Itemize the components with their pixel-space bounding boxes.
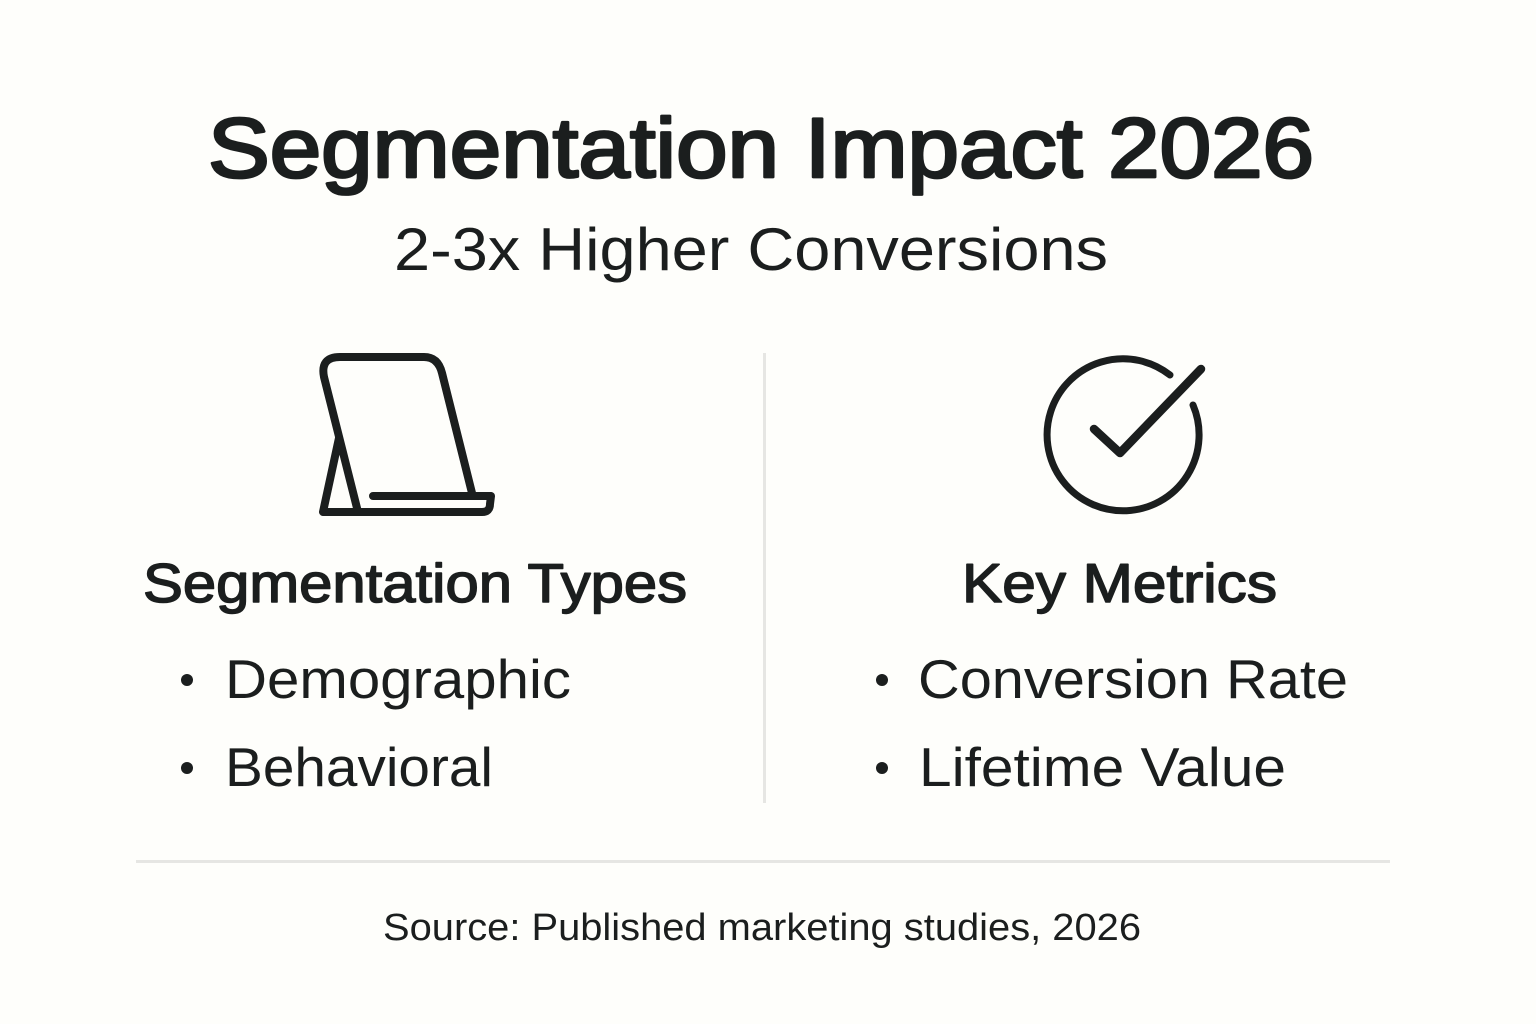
heading: key metrics: Key Metrics	[962, 552, 1277, 614]
source note: Source: Published marketing studies, 2026	[383, 907, 1141, 949]
list: key metrics: Conversion Rate	[918, 648, 1348, 710]
icon: tablet on stand	[323, 357, 491, 512]
panel: segmentation types	[143, 357, 687, 798]
panel: key metrics	[876, 359, 1348, 798]
list: key metrics	[876, 648, 1348, 798]
list: segmentation types	[181, 648, 571, 798]
title: Segmentation Impact 2026	[208, 101, 1314, 195]
list: segmentation types: Behavioral	[225, 736, 493, 798]
subtitle: 2-3x Higher Conversions	[394, 216, 1108, 283]
list: key metrics: Lifetime Value	[919, 736, 1286, 798]
heading: segmentation types: Segmentation Types	[143, 552, 687, 614]
icon: check mark in circle	[1047, 359, 1201, 511]
list: segmentation types: Demographic	[225, 648, 571, 710]
